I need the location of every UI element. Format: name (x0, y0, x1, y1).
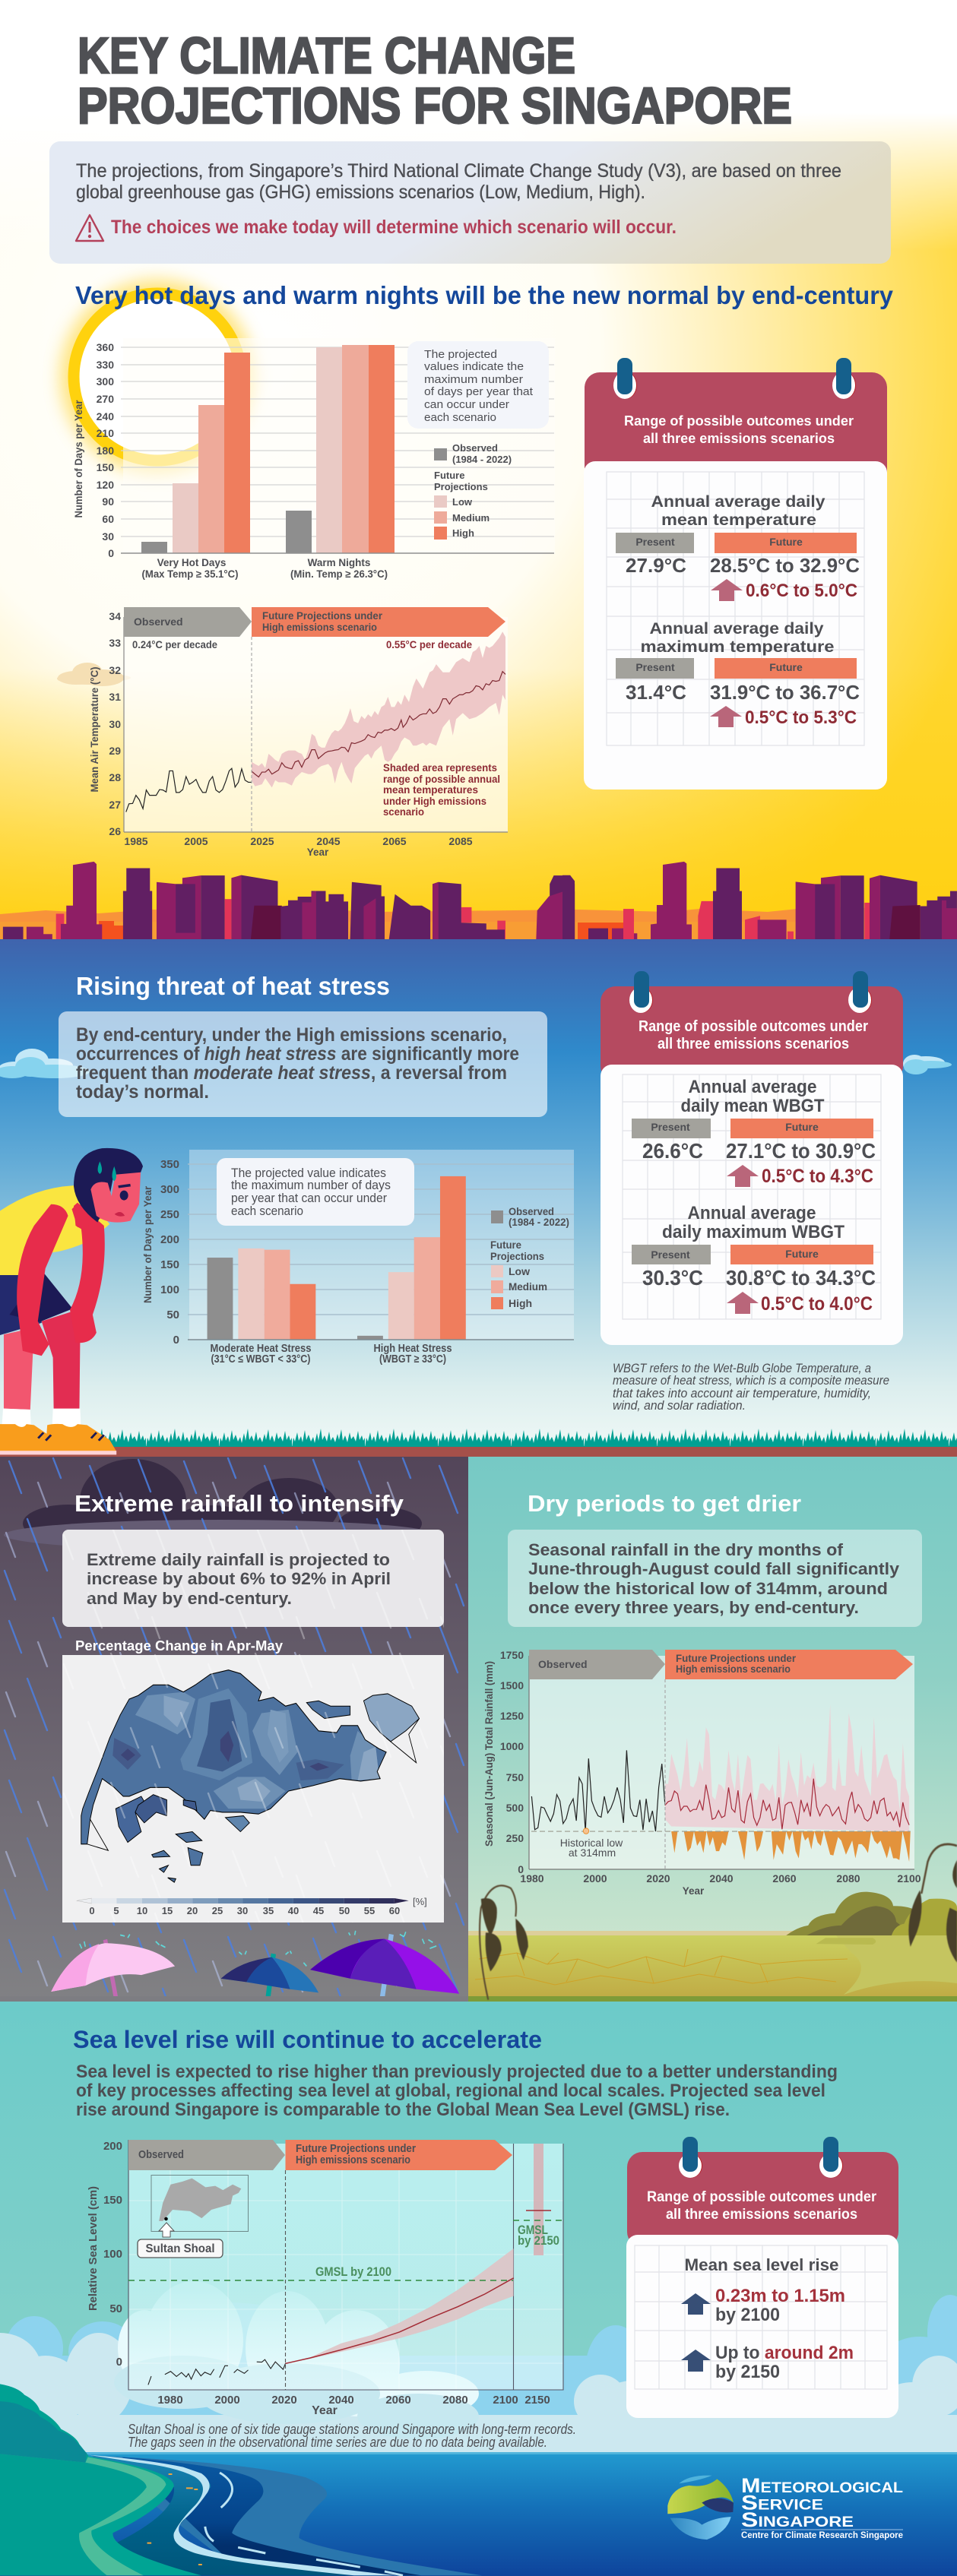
line chart: seasonal rainfall: 750 (506, 1771, 524, 1783)
sea level text: rise around Singapore is comparable to the Global Mean Sea Level (GMSL) rise. (76, 2100, 730, 2120)
banner: future projections: Future Projections under (676, 1652, 797, 1664)
line chart: seasonal rainfall: 2080 (836, 1872, 860, 1885)
colour bar legend: 30 (237, 1905, 248, 1916)
line chart: relative sea level: 2040 (328, 2394, 354, 2407)
icon: cloud (57, 663, 131, 686)
bar chart: heat stress: 150 (160, 1258, 179, 1271)
note: WBGT definition: wind, and solar radiation. (613, 1399, 746, 1413)
coastline (0, 2384, 482, 2575)
section: heat stress (0, 939, 957, 1457)
banner: future projections (665, 1650, 913, 1679)
panel: heat stress text: By end-century, under the High emissions scenario, (76, 1024, 507, 1046)
line chart: mean air temperature: 2045 (316, 835, 341, 847)
calendar card: temperature (584, 358, 887, 790)
sea level text: of key processes affecting sea level at global, regional and local scales. Projected sea level (76, 2081, 825, 2101)
note: Sultan Shoal: The gaps seen in the observational time series are due to no data being available. (128, 2434, 547, 2450)
annotation: shaded area: under High emissions (383, 796, 486, 807)
colour bar legend: 15 (162, 1905, 173, 1916)
heading: very hot days: Very hot days and warm nights will be the new normal by end-century (75, 281, 894, 309)
line chart: mean air temperature: 28 (109, 771, 121, 783)
line chart: mean air temperature: 33 (109, 637, 121, 649)
legend: Observed (509, 1205, 554, 1217)
heading: dry periods: Dry periods to get drier (528, 1490, 801, 1517)
logo wordmark (741, 2474, 903, 2540)
calendar card: temperature: Present (635, 661, 675, 673)
bar chart: heat stress: 0 (173, 1334, 179, 1347)
legend: Low (509, 1265, 530, 1277)
bar chart: very hot days and warm nights: 180 (97, 445, 114, 457)
banner: observed (124, 607, 252, 637)
sea (0, 2384, 957, 2576)
line chart: seasonal rainfall: 1000 (500, 1740, 524, 1752)
line chart: mean air temperature: 2065 (382, 835, 407, 847)
icon: cloud right (903, 1055, 952, 1074)
line chart: mean air temperature: 2085 (448, 835, 473, 847)
bar chart: heat stress: 350 (160, 1158, 179, 1171)
calendar card: WBGT: daily mean WBGT (681, 1096, 825, 1116)
inset map: Sultan Shoal (138, 2175, 248, 2258)
bar chart: very hot days and warm nights: 0 (108, 547, 114, 559)
note: WBGT definition: that takes into account air temperature, humidity, (613, 1387, 871, 1400)
line chart: seasonal rainfall (483, 1649, 921, 1897)
legend: Observed (452, 442, 498, 454)
line chart: mean air temperature: Year (307, 847, 329, 858)
callout: projected value: each scenario (231, 1204, 303, 1218)
line chart: seasonal rainfall: 500 (506, 1802, 524, 1814)
intro text (76, 160, 841, 203)
annotation: shaded area: Shaded area represents (383, 762, 497, 774)
banner: future projections: High emissions scenario (262, 622, 377, 633)
bar chart: very hot days and warm nights: 330 (97, 359, 114, 371)
line chart: mean air temperature: 30 (109, 718, 121, 730)
panel: rainfall text: and May by end-century. (87, 1589, 292, 1608)
bar chart: very hot days and warm nights: 150 (97, 461, 114, 473)
legend: (1984 - 2022) (509, 1216, 569, 1228)
note: Sultan Shoal (128, 2421, 576, 2450)
callout: projected values: maximum number (424, 373, 523, 386)
bar chart: heat stress: (WBGT ≥ 33°C) (379, 1353, 446, 1366)
bar chart: heat stress: 300 (160, 1183, 179, 1196)
callout: projected values (407, 341, 549, 429)
logo wordmark: METEOROLOGICAL (741, 2474, 903, 2497)
icon: tired runner (0, 1148, 143, 1454)
map title: Percentage Change in Apr-May (75, 1638, 283, 1654)
colour bar legend (77, 1896, 427, 1916)
bar chart: very hot days and warm nights: 300 (97, 375, 114, 388)
line chart: relative sea level (87, 2140, 563, 2417)
heading: heat stress: Rising threat of heat stress (76, 972, 390, 1000)
logo globe (667, 2476, 734, 2540)
bar chart: heat stress: 200 (160, 1233, 179, 1246)
bar chart: very hot days and warm nights: (Min. Temp ≥ 26.3°C) (290, 568, 388, 580)
line chart: mean air temperature (89, 607, 508, 858)
legend: (1984 - 2022) (452, 454, 512, 465)
map: percentage change (62, 1655, 444, 1923)
section: dry periods (468, 1457, 957, 2002)
plotted data (531, 1704, 911, 1862)
logo wordmark: SERVICE (741, 2491, 823, 2514)
callout: projected value: The projected value indicates (231, 1166, 386, 1180)
calendar card: WBGT: Future (785, 1121, 819, 1133)
icon: wilted plant left (480, 1885, 528, 2000)
annotation: shaded area: mean temperatures (383, 784, 478, 796)
section: very hot days and warm nights (0, 0, 957, 941)
panel: heat stress text (59, 1011, 547, 1117)
grass and ground (0, 1426, 957, 1457)
bar chart: very hot days and warm nights: Warm Nights (308, 557, 370, 568)
calendar card: mean sea level rise: 0.23m to 1.15m (715, 2286, 845, 2306)
line chart: seasonal rainfall: at 314mm (569, 1847, 616, 1859)
calendar card: WBGT: 30.8°C to 34.3°C (726, 1266, 876, 1290)
calendar card: temperature: maximum temperature (640, 638, 835, 656)
annotation: shaded area: range of possible annual (383, 774, 500, 785)
section: extreme rainfall (0, 1457, 468, 2002)
bar chart: very hot days and warm nights: (Max Temp ≥ 35.1°C) (141, 568, 239, 580)
line chart: relative sea level: 2060 (385, 2394, 411, 2407)
panel: rainfall text: increase by about 6% to 92% in April (87, 1569, 391, 1588)
bar chart: heat stress: 50 (166, 1309, 179, 1321)
calendar card: temperature: Annual average daily (651, 493, 825, 511)
plotted data (126, 631, 505, 812)
callout: projected values: The projected (424, 348, 497, 361)
banner: observed: Observed (134, 616, 183, 628)
legend: High (452, 527, 474, 539)
calendar card: mean sea level rise: all three emissions scenarios (666, 2207, 857, 2223)
line chart: relative sea level: Relative Sea Level (cm) (87, 2186, 100, 2311)
panel: dry periods text: once every three years, by end-century. (528, 1598, 859, 1617)
icon: sun (73, 293, 242, 461)
panel: dry periods text (508, 1530, 922, 1627)
bar chart: very hot days and warm nights: 30 (102, 530, 114, 543)
legend: Medium (452, 512, 490, 524)
line chart: seasonal rainfall: Historical low (560, 1837, 623, 1849)
line chart: mean air temperature: 32 (109, 664, 121, 676)
line chart: relative sea level: GMSL by 2100 (315, 2264, 391, 2279)
calendar card: WBGT: Annual average (689, 1077, 816, 1097)
callout: projected value: the maximum number of days (231, 1179, 391, 1192)
colour bar legend: 0 (89, 1905, 95, 1916)
calendar card: temperature: Range of possible outcomes under (624, 413, 854, 429)
line chart: mean air temperature: 31 (109, 691, 121, 703)
panel: rainfall text (62, 1530, 444, 1627)
annotation: shaded area (383, 762, 500, 818)
line chart: seasonal rainfall: 0 (518, 1863, 524, 1875)
banner: future projections: Future Projections under (296, 2142, 416, 2155)
calendar card: WBGT: 0.5°C to 4.3°C (762, 1166, 873, 1187)
inset map: Sultan Shoal: Sultan Shoal (146, 2242, 214, 2255)
line chart: mean air temperature: 26 (109, 825, 121, 837)
calendar card: WBGT: 30.3°C (642, 1266, 703, 1290)
line chart: seasonal rainfall: 2040 (709, 1872, 734, 1885)
legend: Low (452, 496, 473, 508)
line chart: mean air temperature: Mean Air Temperature (°C) (89, 667, 100, 792)
calendar card: WBGT (601, 971, 903, 1345)
banner: future projections (252, 607, 505, 637)
colour bar legend: 60 (389, 1905, 400, 1916)
icon: wilted plant right (908, 1844, 957, 1963)
icon: cloud left (0, 1049, 90, 1078)
icons: umbrellas (51, 1931, 459, 2002)
note: Sultan Shoal: Sultan Shoal is one of six tide gauge stations around Singapore with long-term records. (128, 2421, 576, 2437)
line chart: seasonal rainfall: 1500 (500, 1679, 524, 1691)
banner: future projections (286, 2140, 512, 2170)
bar chart: very hot days and warm nights (73, 338, 555, 580)
panel: heat stress text: today’s normal. (76, 1081, 209, 1103)
bar chart: heat stress: High Heat Stress (374, 1343, 452, 1355)
icon: storm clouds (4, 1459, 437, 1550)
line chart: relative sea level: 2100 (493, 2394, 518, 2407)
bar chart: heat stress: 100 (160, 1283, 179, 1296)
line chart: seasonal rainfall: 1750 (500, 1649, 524, 1661)
line chart: relative sea level: 2150 (524, 2394, 550, 2407)
line chart: mean air temperature: 34 (109, 610, 121, 622)
skyline (0, 862, 957, 941)
panel: intro (49, 141, 891, 264)
calendar card: mean sea level rise: Mean sea level rise (684, 2255, 839, 2274)
calendar card: temperature: 27.9°C (626, 554, 686, 577)
plotted data (148, 2248, 514, 2385)
panel: heat stress text: frequent than moderate heat stress, a reversal from (76, 1062, 507, 1084)
legend: Future (434, 470, 464, 481)
colour bar legend: 10 (137, 1905, 147, 1916)
colour bar legend: 5 (113, 1905, 119, 1916)
calendar card: temperature: Future (769, 661, 803, 673)
calendar card: WBGT: 27.1°C to 30.9°C (726, 1139, 876, 1163)
callout: projected values: each scenario (424, 411, 496, 424)
legend (490, 1205, 569, 1309)
ground: cracked earth (468, 1931, 957, 2002)
calendar card: WBGT: 0.5°C to 4.0°C (761, 1293, 873, 1315)
banner: future projections: Future Projections under (262, 610, 383, 622)
bar chart: very hot days and warm nights: 210 (97, 427, 114, 439)
title: PROJECTIONS FOR SINGAPORE (78, 78, 792, 134)
sea level text: Sea level is expected to rise higher than previously projected due to a better understanding (76, 2062, 838, 2082)
banner: future projections: High emissions scenario (296, 2154, 410, 2166)
line chart: mean air temperature: 0.24°C per decade (132, 639, 217, 650)
panel: heat stress text: occurrences of high heat stress are significantly more (76, 1043, 519, 1065)
colour bar legend: [%] (413, 1896, 427, 1907)
callout: projected values: of days per year that (424, 385, 534, 398)
title (78, 27, 792, 134)
divider: rain and dry edge (0, 1996, 468, 2002)
legend: Medium (509, 1280, 547, 1293)
colour bar legend: 20 (187, 1905, 198, 1916)
bar chart: very hot days and warm nights: 360 (97, 341, 114, 353)
bar chart: very hot days and warm nights: 270 (97, 393, 114, 405)
line chart: seasonal rainfall: Seasonal (Jun-Aug) Total Rainfall (mm) (483, 1661, 495, 1847)
line chart: mean air temperature: 29 (109, 745, 121, 757)
callout: projected values: can occur under (424, 398, 509, 411)
banner: observed (128, 2140, 285, 2170)
line chart: relative sea level: 0 (116, 2356, 122, 2369)
line chart: relative sea level: 50 (109, 2302, 122, 2315)
line chart: mean air temperature: 1985 (124, 835, 148, 847)
calendar card: temperature: Future (769, 536, 803, 548)
line chart: seasonal rainfall: 1250 (500, 1710, 524, 1722)
colour bar legend: 40 (288, 1905, 299, 1916)
callout: projected value: per year that can occur under (231, 1191, 387, 1205)
note: WBGT definition: measure of heat stress, which is a composite measure (613, 1374, 889, 1388)
line chart: seasonal rainfall: 2020 (646, 1872, 670, 1885)
note: WBGT definition: WBGT refers to the Wet-Bulb Globe Temperature, a (613, 1362, 871, 1375)
line chart: relative sea level: 2080 (442, 2394, 468, 2407)
banner: observed: Observed (538, 1658, 588, 1670)
legend (434, 442, 512, 540)
panel: dry periods text: below the historical low of 314mm, around (528, 1579, 888, 1598)
calendar card: temperature: 31.4°C (626, 681, 686, 704)
calendar card: temperature: 0.5°C to 5.3°C (745, 707, 857, 728)
intro text: global greenhouse gas (GHG) emissions scenarios (Low, Medium, High). (76, 182, 645, 203)
bar chart: heat stress: Number of Days per Year (141, 1185, 154, 1303)
line chart: relative sea level: 2020 (271, 2394, 297, 2407)
line chart: mean air temperature: 27 (109, 799, 121, 811)
calendar card: WBGT: Future (785, 1248, 819, 1260)
bar chart: heat stress: (31°C ≤ WBGT < 33°C) (211, 1353, 311, 1366)
bar chart: very hot days and warm nights: Very Hot Days (157, 557, 226, 568)
bar chart: very hot days and warm nights: Number of Days per Year (73, 400, 84, 518)
line chart: relative sea level: 1980 (157, 2394, 183, 2407)
calendar card: WBGT: Annual average (687, 1203, 816, 1223)
line chart: seasonal rainfall: 250 (506, 1832, 524, 1844)
line chart: relative sea level: 100 (103, 2248, 122, 2261)
calendar card: mean sea level rise: by 2100 (715, 2305, 780, 2325)
legend: High (509, 1297, 532, 1309)
calendar card: mean sea level rise: by 2150 (715, 2362, 780, 2382)
calendar card: temperature: Annual average daily (649, 620, 824, 638)
line chart: mean air temperature: 2025 (250, 835, 274, 847)
calendar card: temperature: 0.6°C to 5.0°C (746, 581, 857, 601)
title: KEY CLIMATE CHANGE (78, 27, 575, 84)
calendar card: WBGT: Present (651, 1121, 690, 1133)
calendar card: WBGT: Present (651, 1248, 690, 1261)
heading: sea level: Sea level rise will continue to accelerate (73, 2026, 542, 2053)
calendar card: WBGT: daily maximum WBGT (662, 1222, 845, 1242)
intro text: The projections, from Singapore’s Third National Climate Change Study (V3), are based on three (76, 160, 841, 182)
calendar card: mean sea level rise (626, 2137, 898, 2418)
legend: Projections (434, 481, 488, 492)
bar chart: very hot days and warm nights: 60 (102, 513, 114, 525)
colour bar legend: 45 (313, 1905, 324, 1916)
GMSL by 2150 bar: GMSL (518, 2223, 548, 2237)
bar chart: heat stress: 250 (160, 1208, 179, 1221)
annotation: shaded area: scenario (383, 806, 424, 818)
logo wordmark: Centre for Climate Research Singapore (741, 2531, 903, 2540)
section: sea level rise (0, 2002, 957, 2576)
panel: dry periods text: June-through-August could fall significantly (528, 1559, 900, 1578)
logo wordmark: SINGAPORE (741, 2508, 854, 2531)
line chart: relative sea level: 2000 (214, 2394, 240, 2407)
calendar card: temperature: 31.9°C to 36.7°C (710, 681, 860, 704)
callout: projected values: values indicate the (424, 360, 524, 373)
colour bar legend: 25 (212, 1905, 223, 1916)
banner: observed (529, 1650, 665, 1679)
note: WBGT definition (613, 1362, 889, 1413)
colour bar legend: 55 (364, 1905, 375, 1916)
legend: Future (490, 1239, 521, 1251)
line chart: seasonal rainfall: 1980 (520, 1872, 544, 1885)
banner: future projections: High emissions scenario (676, 1663, 791, 1675)
line chart: relative sea level: 200 (103, 2140, 122, 2153)
calendar card: WBGT: Range of possible outcomes under (639, 1018, 868, 1035)
colour bar legend: 35 (263, 1905, 274, 1916)
bar chart: heat stress: Moderate Heat Stress (210, 1343, 312, 1355)
calendar card: WBGT: all three emissions scenarios (658, 1036, 849, 1052)
icon: warning triangle (76, 215, 103, 241)
line chart: mean air temperature: 0.55°C per decade (386, 639, 472, 650)
bar chart: very hot days and warm nights: 240 (97, 410, 114, 422)
bar chart: heat stress (141, 1150, 574, 1366)
logo: Meteorological Service Singapore (667, 2474, 903, 2540)
GMSL by 2150 bar: by 2150 (518, 2233, 559, 2248)
bar chart: very hot days and warm nights: 120 (97, 479, 114, 491)
colour bar legend: 50 (339, 1905, 350, 1916)
sea level text (76, 2062, 838, 2120)
clouds (0, 2281, 957, 2454)
legend: Projections (490, 1250, 544, 1262)
heading: rainfall: Extreme rainfall to intensify (74, 1490, 404, 1517)
callout: projected value (217, 1158, 414, 1226)
calendar card: temperature: mean temperature (661, 511, 816, 529)
warning text: The choices we make today will determine which scenario will occur. (111, 217, 677, 238)
calendar card: temperature: Present (635, 536, 675, 548)
bar chart: very hot days and warm nights: 90 (102, 495, 114, 508)
panel: dry periods text: Seasonal rainfall in the dry months of (528, 1540, 844, 1559)
calendar card: WBGT: 26.6°C (642, 1139, 703, 1163)
line chart: seasonal rainfall: 2060 (772, 1872, 797, 1885)
line chart: seasonal rainfall: 2100 (897, 1872, 921, 1885)
line chart: seasonal rainfall: 2000 (583, 1872, 607, 1885)
calendar card: temperature: 28.5°C to 32.9°C (710, 554, 860, 577)
panel: rainfall text: Extreme daily rainfall is projected to (87, 1550, 390, 1569)
calendar card: mean sea level rise: Up to around 2m (715, 2343, 854, 2363)
bushes (786, 1892, 957, 1945)
line chart: mean air temperature: 2005 (184, 835, 208, 847)
calendar card: temperature: all three emissions scenarios (643, 431, 835, 446)
line chart: seasonal rainfall: Year (683, 1885, 705, 1897)
GMSL by 2150 bar (513, 2144, 563, 2255)
line chart: relative sea level: Year (312, 2404, 337, 2417)
calendar card: mean sea level rise: Range of possible outcomes under (647, 2189, 877, 2205)
line chart: relative sea level: 150 (103, 2194, 122, 2207)
banner: observed: Observed (138, 2148, 184, 2161)
